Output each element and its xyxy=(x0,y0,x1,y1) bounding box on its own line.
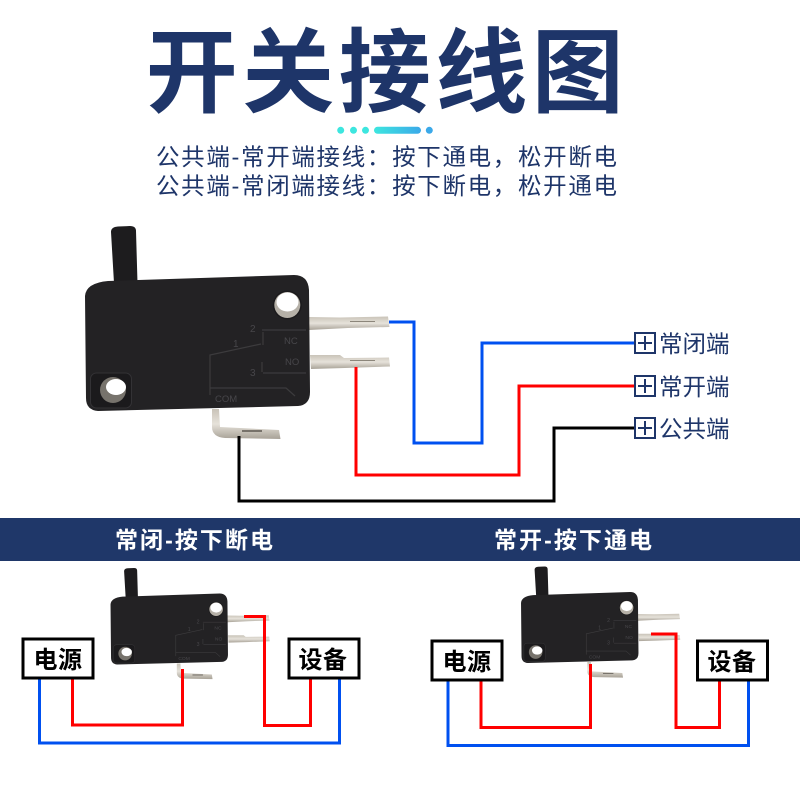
left small switch: 1 xyxy=(188,627,191,633)
right small switch: 2 xyxy=(607,618,610,624)
right small switch: 3 xyxy=(607,641,610,647)
left small switch: 2 xyxy=(197,619,200,625)
left circuit wires xyxy=(40,616,340,743)
label: common: 公共端 xyxy=(659,416,730,442)
main switch photo illustration: COM xyxy=(215,394,237,405)
subtitle text block: 公共端-常开端接线：按下通电，松开断电 xyxy=(156,144,617,170)
main switch photo illustration: 2 xyxy=(250,324,256,335)
main switch photo illustration: 3 xyxy=(250,368,256,379)
subtitle text block xyxy=(156,144,617,199)
wire: normally open (red) xyxy=(356,367,635,475)
lower terminal NO xyxy=(310,355,390,369)
left power box xyxy=(23,639,93,678)
wires and terminal labels xyxy=(239,322,635,501)
main switch photo illustration: 1 xyxy=(233,339,239,350)
right device box xyxy=(698,641,768,680)
left small switch: 3 xyxy=(197,642,200,648)
upper terminal NC xyxy=(309,316,390,330)
right device box: 设备 xyxy=(708,649,756,676)
banner heading: normally open: 常开-按下通电 xyxy=(494,527,652,553)
banner heading: normally closed: 常闭-按下断电 xyxy=(115,527,273,553)
left device box xyxy=(289,639,359,678)
left small switch: COM xyxy=(178,656,190,662)
right small switch: COM xyxy=(589,654,600,660)
wire: common (black) xyxy=(239,428,635,501)
right power box: 电源 xyxy=(442,649,492,676)
left device box: 设备 xyxy=(298,647,348,674)
main switch photo illustration: NC xyxy=(284,336,298,347)
switch body xyxy=(85,275,310,411)
label: normally open: 常开端 xyxy=(659,374,730,400)
plunger xyxy=(111,226,138,283)
left power box: 电源 xyxy=(34,647,82,674)
banner xyxy=(0,518,800,561)
title: 开关接线图 xyxy=(146,23,628,125)
left small switch: NO xyxy=(215,637,222,643)
molded circuit markings xyxy=(210,330,306,396)
decorative dots and gradient bar xyxy=(337,127,433,134)
wire: normally closed (blue) xyxy=(389,322,635,443)
main switch photo illustration xyxy=(85,226,390,439)
right small switch: NC xyxy=(625,624,632,630)
left small switch: NC xyxy=(214,626,222,632)
right circuit wires xyxy=(448,634,748,746)
right small switch: NO xyxy=(625,635,633,641)
right small switch: 1 xyxy=(598,626,601,632)
upper mounting hole xyxy=(273,290,302,320)
main switch photo illustration: NO xyxy=(285,357,299,368)
COM terminal xyxy=(212,409,280,439)
left small switch xyxy=(111,568,270,679)
label: normally closed: 常闭端 xyxy=(659,331,730,357)
lower mounting hole xyxy=(90,373,132,408)
right power box xyxy=(432,641,502,680)
subtitle text block: 公共端-常闭端接线：按下断电，松开通电 xyxy=(156,173,617,199)
right small switch xyxy=(521,566,680,678)
